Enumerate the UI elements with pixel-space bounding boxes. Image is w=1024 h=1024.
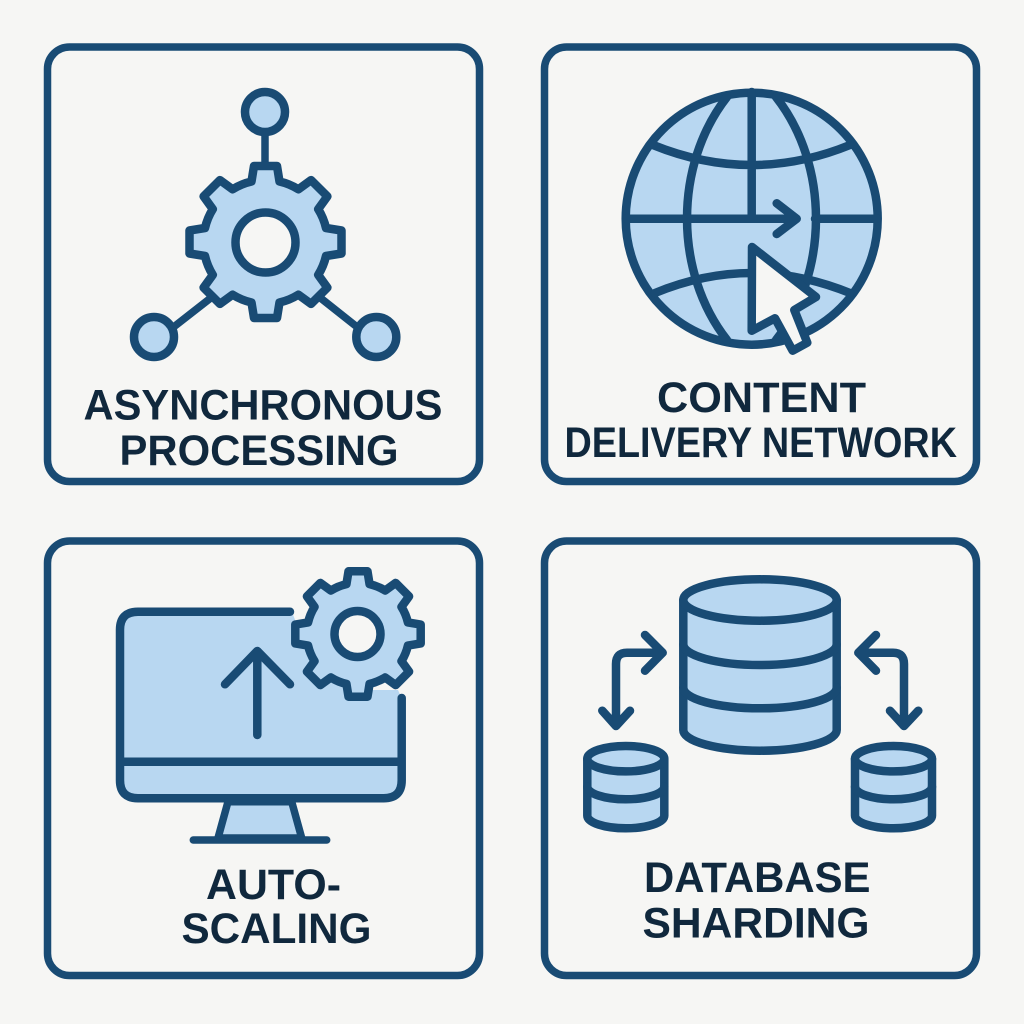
panel: content delivery network xyxy=(544,47,976,482)
text: auto-scaling label: SCALING xyxy=(182,906,372,953)
text: auto-scaling label: AUTO- xyxy=(206,862,341,909)
icon: monitor with gear and arrow xyxy=(120,571,421,840)
text: database sharding label xyxy=(642,855,870,948)
text: asynchronous processing label xyxy=(84,382,442,475)
panel: database sharding xyxy=(544,541,976,976)
text: database sharding label: DATABASE xyxy=(644,855,870,902)
text: database sharding label: SHARDING xyxy=(642,900,870,948)
text: content delivery network label: DELIVERY NETWORK xyxy=(564,420,957,467)
text: asynchronous processing label: ASYNCHRONOUS xyxy=(84,382,442,430)
text: asynchronous processing label: PROCESSING xyxy=(120,428,398,475)
panel: asynchronous processing xyxy=(48,47,480,482)
text: content delivery network label xyxy=(564,375,957,467)
icon: gear with three nodes xyxy=(134,92,396,357)
icon: database shards with arrows xyxy=(587,579,932,828)
icon: globe with cursor xyxy=(626,92,878,351)
panel: auto-scaling xyxy=(48,541,480,976)
text: content delivery network label: CONTENT xyxy=(657,375,866,422)
text: auto-scaling label xyxy=(182,862,372,953)
